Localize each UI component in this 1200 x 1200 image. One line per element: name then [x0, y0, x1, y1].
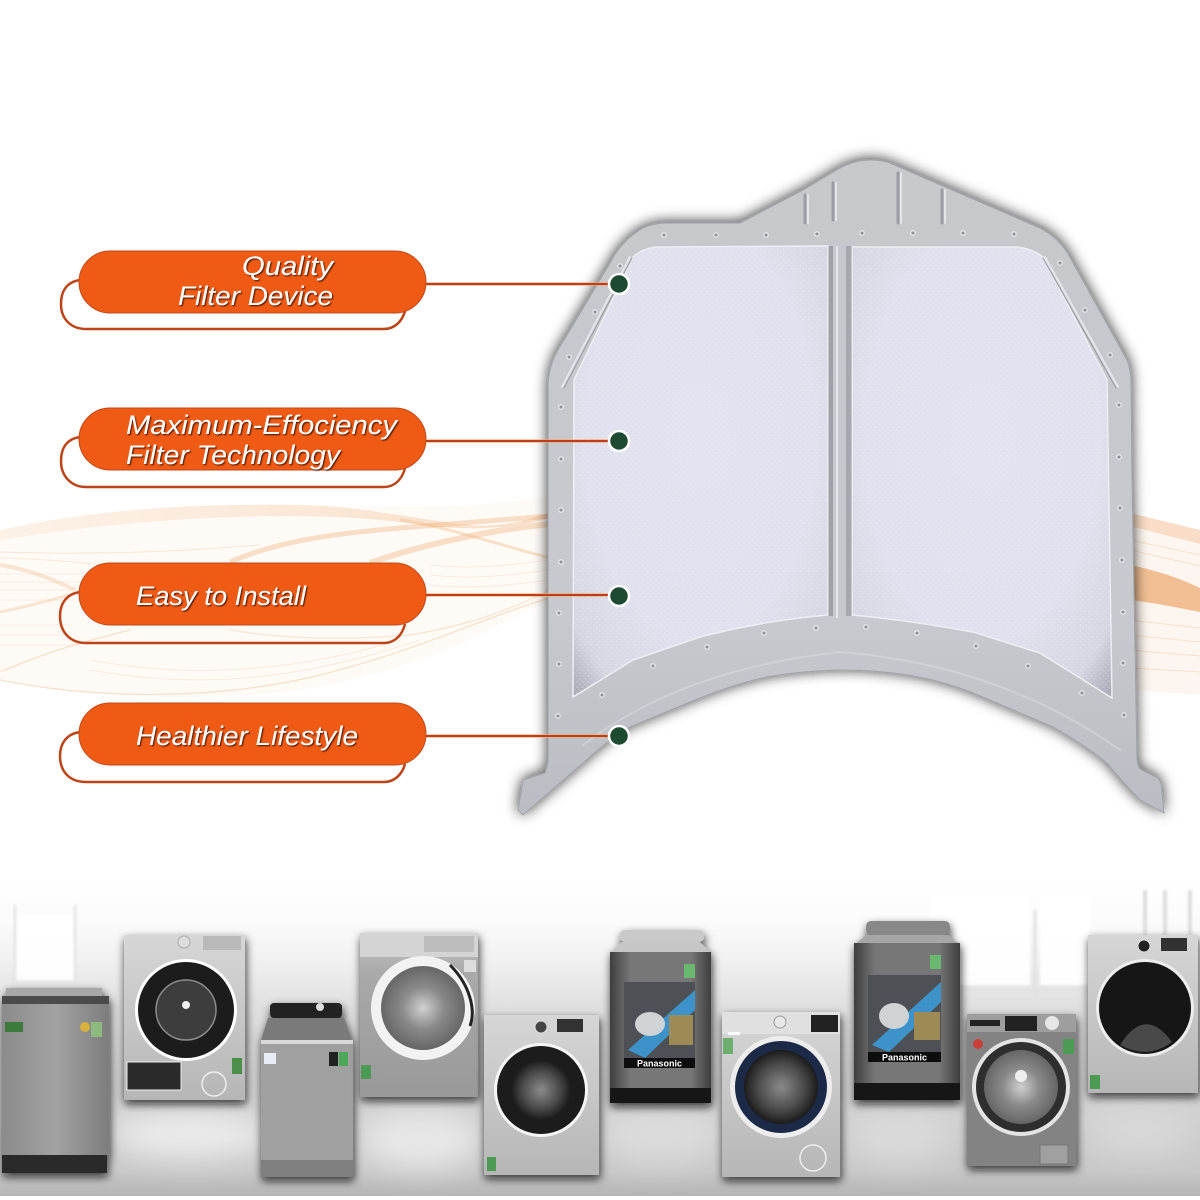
centre divider: [828, 246, 852, 618]
washer 4: silver front loader: [360, 933, 478, 1097]
pill text: Maximum-Effociency: [126, 410, 399, 440]
poster: [624, 982, 695, 1068]
poster: Panasonic: [882, 1052, 927, 1062]
marker dot: [609, 274, 629, 294]
pill text: Easy to Install: [136, 581, 307, 611]
left mesh panel: [573, 246, 828, 697]
leader line: [426, 439, 610, 443]
rivet holes: [556, 231, 1126, 718]
laundry room backdrop: [0, 880, 1200, 1200]
callout: Easy to Install: [60, 563, 629, 643]
pill: [79, 408, 426, 470]
washer 3: grey top loader: [261, 1003, 353, 1177]
poster: Panasonic: [637, 1058, 682, 1068]
leader line: [426, 593, 610, 597]
filter frame: [518, 160, 1164, 815]
marker dot: [609, 726, 629, 746]
pill text: [126, 410, 399, 470]
pill: [79, 703, 426, 765]
washer 9: dark silver front loader: [967, 1014, 1076, 1166]
pill text: Filter Device: [178, 281, 333, 311]
pill outline: [60, 592, 405, 643]
pill text: Filter Technology: [126, 440, 342, 470]
marker dot: [609, 586, 629, 606]
product photo: dryer lint filter: [518, 160, 1164, 815]
washer 5: white front loader: [484, 1015, 599, 1175]
pill text: [178, 251, 335, 311]
leader line: [426, 282, 610, 286]
poster: [868, 975, 941, 1062]
callout: Healthier Lifestyle: [60, 703, 629, 782]
callout: Maximum-Effociency Filter Technology: [61, 408, 629, 487]
windows: [15, 890, 1190, 1002]
pill outline: [61, 280, 405, 329]
background wave ribbons: [0, 496, 1200, 697]
pill outline: [60, 732, 405, 782]
pill: [79, 563, 426, 625]
marker dot: [609, 431, 629, 451]
pill text: Quality: [242, 251, 335, 281]
leader line: [426, 734, 610, 738]
callout: Quality Filter Device: [61, 251, 629, 329]
pill outline: [61, 437, 405, 487]
washer 8: Panasonic top loader: [854, 921, 960, 1100]
washer 7: Electrolux front loader: [722, 1012, 840, 1177]
right mesh panel: [852, 247, 1112, 698]
washer 6: Panasonic top loader: [610, 930, 711, 1103]
washer 2: white front loader: [124, 935, 245, 1100]
floor highlights: [110, 1106, 1190, 1168]
pill text: Healthier Lifestyle: [136, 721, 358, 751]
pill: [79, 251, 426, 313]
frame ribs: [562, 173, 1120, 750]
washer 1: grey top loader: [2, 988, 109, 1173]
washer 10: silver front loader: [1088, 935, 1198, 1093]
